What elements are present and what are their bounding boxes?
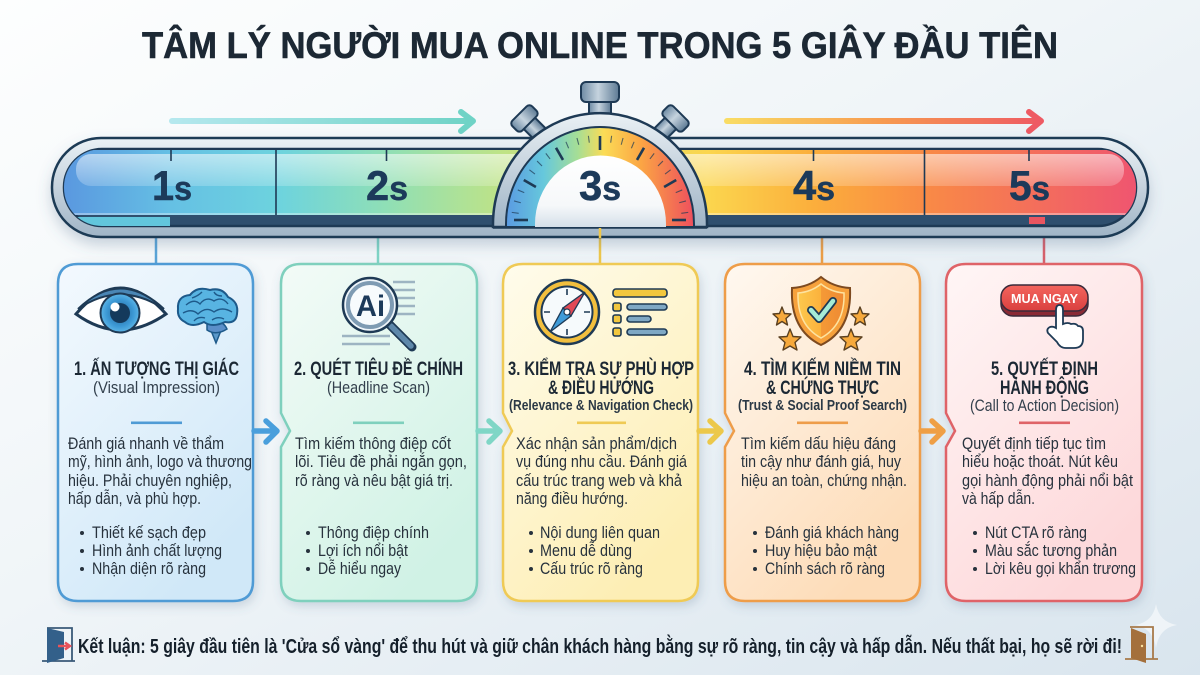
- panel: step 3 relevance and navigation: [503, 264, 698, 601]
- bullet list: Thông điệp chính: [318, 524, 429, 542]
- heading: & CHỨNG THỰC: [766, 377, 879, 399]
- icon: navigation list: [613, 289, 667, 336]
- heading: HÀNH ĐỘNG: [1000, 377, 1089, 399]
- description: Quyết định tiếp tục tìm: [962, 435, 1106, 453]
- description: hiệu an toàn, chứng nhận.: [741, 472, 907, 490]
- time labels: 3s: [579, 162, 621, 209]
- icon: compass: [535, 280, 599, 344]
- bullet list: Lợi ích nổi bật: [318, 542, 408, 560]
- arrow: top left progress: [172, 112, 473, 131]
- panel: step 2 headline scan: [281, 264, 477, 601]
- bullet list: [80, 524, 222, 578]
- heading: [970, 358, 1119, 415]
- bullet list: Nút CTA rõ ràng: [985, 524, 1087, 542]
- icon: buy now button with pointer: MUA NGAY: [1011, 292, 1079, 306]
- heading: 5. QUYẾT ĐỊNH: [991, 358, 1098, 380]
- bullet list: Lời kêu gọi khẩn trương: [985, 560, 1136, 578]
- icon: buy now button with pointer: [1001, 285, 1088, 348]
- panel: step 5 call to action: [946, 264, 1142, 601]
- description: lõi. Tiêu đề phải ngắn gọn,: [295, 452, 467, 471]
- bullet list: [753, 524, 899, 578]
- description: gọi hành động phải nổi bật: [962, 472, 1133, 490]
- heading: (Visual Impression): [93, 379, 220, 397]
- arrow: step 3 to 4: [699, 421, 721, 442]
- bullet list: Huy hiệu bảo mật: [765, 542, 877, 560]
- icon: eye: [76, 288, 166, 332]
- bullet list: [529, 524, 660, 578]
- heading: (Relevance & Navigation Check): [509, 397, 693, 414]
- heading: (Headline Scan): [327, 379, 430, 397]
- description: tin cậy như đánh giá, huy: [741, 453, 902, 471]
- stopwatch bezel: [493, 113, 707, 227]
- bar base rim: [493, 227, 707, 229]
- description: và hấp dẫn.: [962, 489, 1035, 508]
- description: [962, 435, 1133, 508]
- heading: 1. ẤN TƯỢNG THỊ GIÁC: [74, 358, 239, 380]
- icon: sparkle: [1135, 604, 1177, 648]
- icon: magnifier over text: Ai: [356, 290, 385, 323]
- bullet list: [306, 524, 429, 578]
- heading: (Trust & Social Proof Search): [738, 397, 907, 414]
- bullet list: Hình ảnh chất lượng: [92, 542, 222, 560]
- time labels: 2s: [366, 162, 408, 209]
- description: Xác nhận sản phẩm/dịch: [516, 435, 677, 453]
- connector stems: [156, 215, 1044, 264]
- arrow: step 2 to 3: [478, 421, 500, 442]
- icon: brain: [178, 289, 237, 343]
- arrow: top right progress: [727, 112, 1041, 131]
- heading: [74, 358, 239, 397]
- description: năng điều hướng.: [516, 490, 628, 508]
- arrow: step 4 to 5: [921, 421, 943, 442]
- description: [516, 435, 688, 508]
- arrow: step 1 to 2: [254, 421, 277, 442]
- heading: 3. KIỂM TRA SỰ PHÙ HỢP: [508, 358, 694, 380]
- bullet list: Chính sách rõ ràng: [765, 560, 885, 578]
- heading: [738, 358, 907, 414]
- description: [68, 435, 252, 508]
- description: mỹ, hình ảnh, logo và thương: [68, 453, 252, 471]
- heading: [294, 358, 463, 397]
- time labels: 5s: [1009, 162, 1050, 209]
- description: rõ ràng và nêu bật giá trị.: [295, 472, 453, 490]
- time labels: 4s: [793, 162, 835, 209]
- stopwatch knobs: [510, 82, 690, 144]
- heading: 2. QUÉT TIÊU ĐỀ CHÍNH: [294, 358, 463, 380]
- yellow connector tip: [599, 228, 601, 238]
- heading: (Call to Action Decision): [970, 397, 1119, 415]
- heading: [508, 358, 694, 414]
- gauge face: [535, 155, 666, 227]
- time labels: [152, 162, 1050, 209]
- icon: exit door: [42, 628, 75, 663]
- title: TÂM LÝ NGƯỜI MUA ONLINE TRONG 5 GIÂY ĐẦU TIÊN: [142, 24, 1058, 66]
- panel: step 4 trust and social proof: [725, 264, 920, 601]
- description: [741, 435, 907, 490]
- description: hiệu. Phải chuyên nghiệp,: [68, 472, 232, 490]
- icon: brown door: [1125, 627, 1158, 663]
- description: hấp dẫn, và phù hợp.: [68, 489, 201, 508]
- bullet list: Màu sắc tương phản: [985, 541, 1117, 560]
- gauge ticks: [512, 136, 688, 220]
- description: Đánh giá nhanh về thẩm: [68, 435, 224, 453]
- heading: 4. TÌM KIẾM NIỀM TIN: [744, 358, 901, 380]
- icon: magnifier over text: [342, 278, 415, 347]
- stopwatch: [493, 82, 707, 227]
- description: hiểu hoặc thoát. Nút kêu: [962, 453, 1118, 471]
- description: Tìm kiếm dấu hiệu đáng: [741, 435, 896, 453]
- bullet list: Đánh giá khách hàng: [765, 524, 899, 542]
- bullet list: Dễ hiểu ngay: [318, 559, 402, 578]
- bullet list: Nhận diện rõ ràng: [92, 560, 206, 578]
- description: Tìm kiếm thông điệp cốt: [295, 435, 451, 453]
- bullet list: Nội dung liên quan: [540, 524, 660, 542]
- bullet list: Cấu trúc rõ ràng: [540, 560, 643, 578]
- gauge ring: [506, 127, 694, 227]
- bullet list: [973, 524, 1136, 578]
- bullet list: Menu dễ dùng: [540, 541, 632, 560]
- description: [295, 435, 467, 490]
- description: cấu trúc trang web và khả: [516, 472, 683, 490]
- timeline bar: [52, 138, 1148, 237]
- time labels: 1s: [152, 162, 192, 209]
- bullet list: Thiết kế sạch đẹp: [92, 524, 206, 542]
- panel: step 1 visual impression: [58, 264, 253, 601]
- icon: shield with check and stars: [773, 277, 869, 350]
- description: vụ đúng nhu cầu. Đánh giá: [516, 453, 688, 471]
- heading: & ĐIỀU HƯỚNG: [548, 377, 654, 399]
